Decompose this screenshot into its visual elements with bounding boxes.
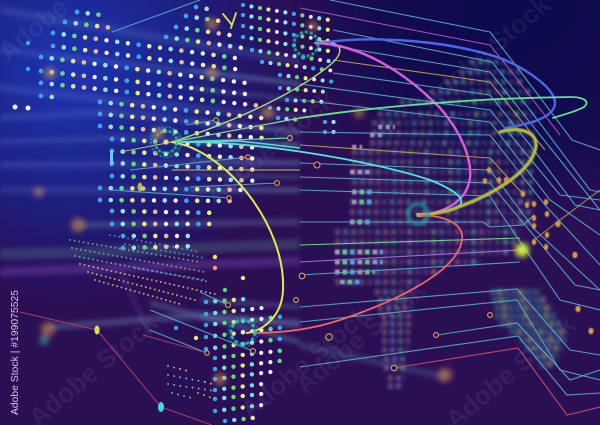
hub connection lines	[120, 118, 300, 170]
dotted map: main continent	[41, 7, 262, 248]
side credit text: Adobe Stock | #199075525	[10, 290, 21, 415]
arc: blue	[322, 39, 555, 128]
hub ring: blurred centre	[408, 204, 428, 224]
sharper map squares near the centre	[335, 127, 395, 282]
dotted map: lower continent	[206, 299, 287, 421]
watermarks: Adobe Stock	[235, 299, 376, 425]
loose dots	[15, 43, 243, 338]
hub ring: upper right	[294, 32, 318, 56]
hub ring: main	[151, 127, 181, 157]
dotted map: upper-right continent	[243, 5, 335, 132]
coloured ellipse nodes	[94, 150, 164, 412]
watermarks: Adobe Stock	[200, 84, 341, 210]
arc: yellow	[172, 142, 283, 333]
arc: green-yellow thin	[172, 41, 340, 142]
orange ring nodes	[205, 118, 492, 371]
yellow glyph marks near top	[223, 13, 236, 28]
watermarks: Adobe Stock	[290, 274, 431, 400]
fading perspective dot field	[70, 235, 215, 304]
arc: olive	[418, 130, 536, 215]
blurred light bands on the left	[0, 10, 445, 377]
arc: green	[300, 97, 586, 118]
arc: pink	[315, 43, 470, 216]
arc: red	[253, 215, 462, 333]
blurred teal continent	[490, 292, 566, 364]
arc: teal	[172, 142, 461, 214]
hub ring: lower	[228, 317, 258, 347]
glow blobs	[34, 18, 529, 385]
small dotted panel	[168, 366, 215, 399]
soft orange nodes on the right	[483, 167, 594, 334]
blurred map blocks: right-hand continents	[335, 62, 535, 386]
